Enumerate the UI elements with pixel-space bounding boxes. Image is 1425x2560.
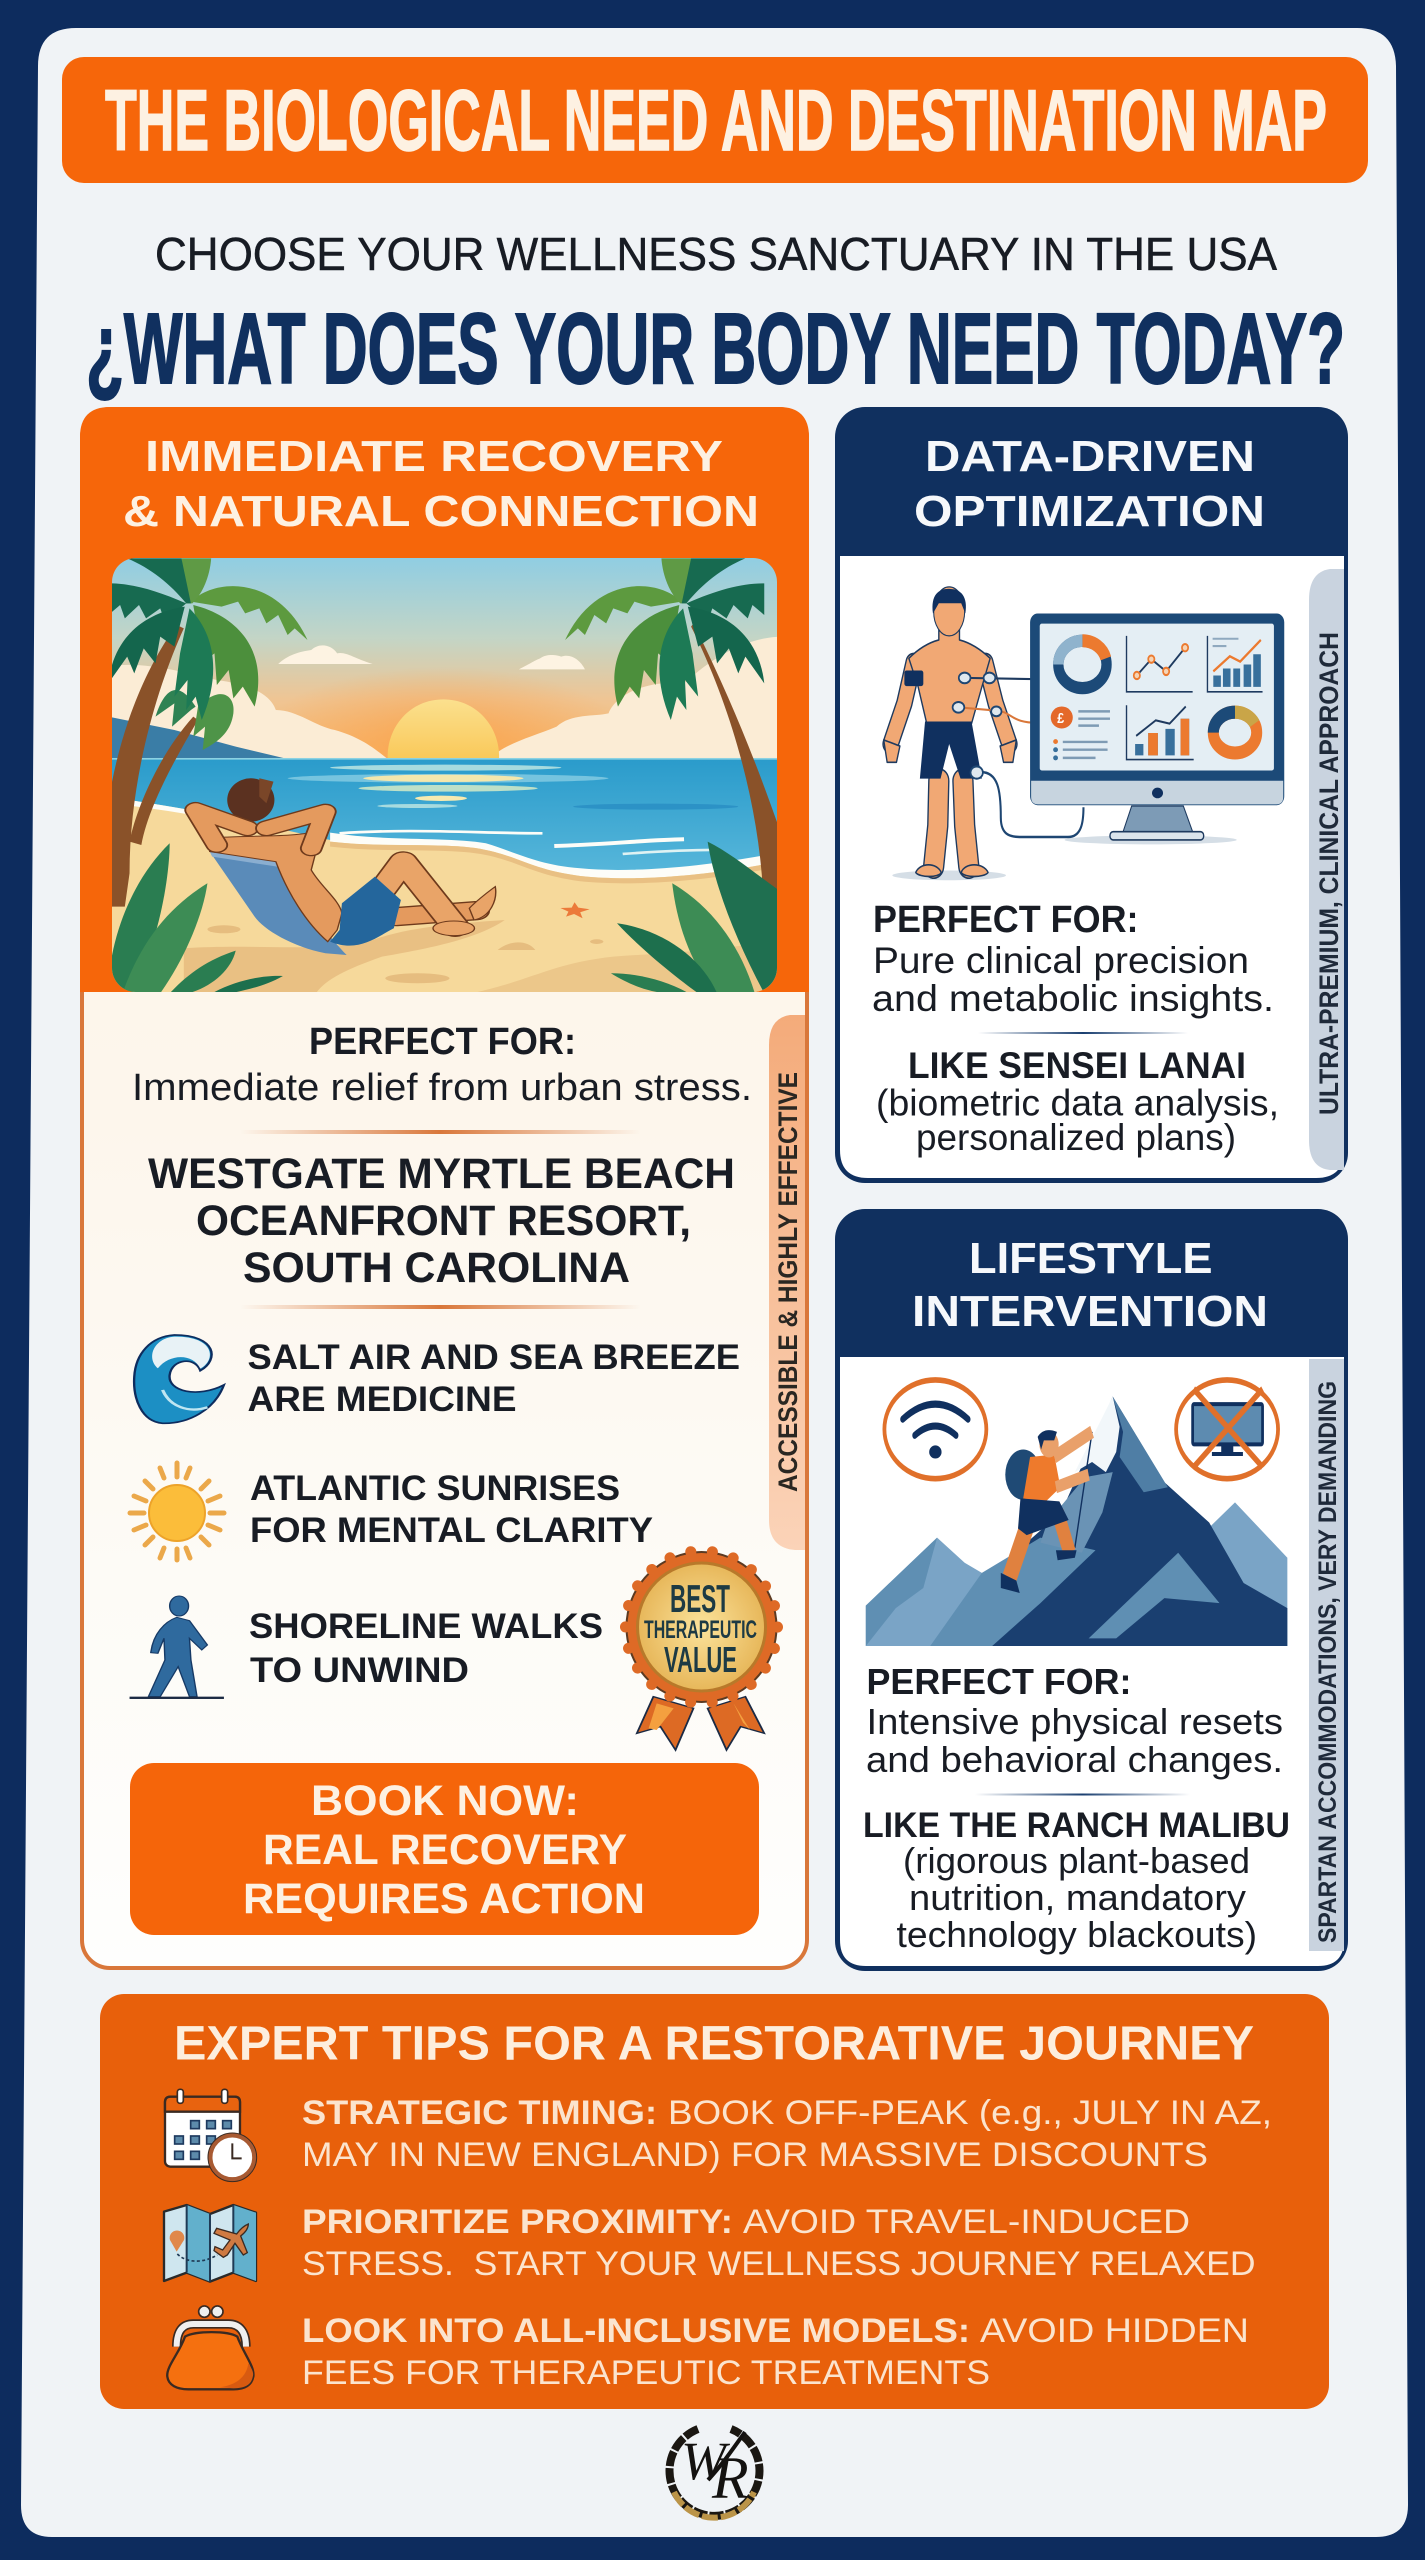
perfect for block: and behavioral changes. [866, 1739, 1283, 1780]
call to action button: REAL RECOVERY [263, 1826, 627, 1874]
perfect for block: PERFECT FOR: [866, 1661, 1132, 1702]
panel: data-driven optimization [835, 407, 1348, 1183]
heading: lifestyle intervention: INTERVENTION [912, 1287, 1268, 1336]
illustration: climber on mountain with no wifi and no screens [866, 1380, 1287, 1646]
perfect for block: PERFECT FOR: [873, 899, 1138, 941]
destination: the ranch malibu: technology blackouts) [896, 1914, 1257, 1955]
destination name: SOUTH CAROLINA [243, 1244, 630, 1292]
tip: all-inclusive models: FEES FOR THERAPEUTIC TREATMENTS [302, 2354, 990, 2392]
tip: strategic timing: MAY IN NEW ENGLAND) FOR MASSIVE DISCOUNTS [302, 2136, 1208, 2174]
panel: expert tips [100, 1994, 1329, 2409]
call to action button: REQUIRES ACTION [243, 1875, 645, 1923]
heading: expert tips: EXPERT TIPS FOR A RESTORATIVE JOURNEY [174, 2018, 1254, 2070]
heading: lifestyle intervention [912, 1234, 1268, 1336]
icon: no screens [1176, 1380, 1278, 1479]
badge: best therapeutic value: THERAPEUTIC [644, 1616, 757, 1644]
side tab: spartan accommodations: SPARTAN ACCOMMODATIONS, VERY DEMANDING [1314, 1381, 1342, 1943]
destination name: OCEANFRONT RESORT, [196, 1197, 691, 1245]
tip: strategic timing [302, 2094, 1272, 2174]
heading: data-driven optimization [914, 432, 1265, 536]
tip: all-inclusive models: AVOID HIDDEN [980, 2312, 1249, 2350]
icon: calendar and clock [165, 2089, 257, 2182]
benefit: shoreline walks [130, 1596, 603, 1699]
destination: sensei lanai: personalized plans) [916, 1117, 1236, 1158]
call to action button [130, 1763, 759, 1935]
side tab: accessible and highly effective: ACCESSIBLE & HIGHLY EFFECTIVE [773, 1072, 803, 1492]
perfect for block [132, 1021, 752, 1109]
destination: the ranch malibu: LIKE THE RANCH MALIBU [863, 1806, 1290, 1845]
logo: WR laurel [670, 2429, 760, 2518]
benefit: atlantic sunrises: ATLANTIC SUNRISES [250, 1469, 620, 1508]
benefit: shoreline walks: TO UNWIND [250, 1651, 469, 1690]
badge: best therapeutic value [626, 1551, 778, 1750]
icon: wifi [884, 1380, 986, 1479]
icon: wave [134, 1335, 224, 1423]
icon: map with airplane [164, 2205, 256, 2282]
panel header: immediate recovery: IMMEDIATE RECOVERY [145, 432, 723, 481]
illustration: body sensors connected to monitor: £ [1057, 710, 1065, 726]
destination: sensei lanai [876, 1045, 1279, 1158]
tip: prioritize proximity [302, 2203, 1256, 2283]
tip: prioritize proximity: STRESS. START YOUR WELLNESS JOURNEY RELAXED [302, 2245, 1256, 2283]
benefit: salt air: SALT AIR AND SEA BREEZE [248, 1338, 740, 1377]
tip: all-inclusive models: LOOK INTO ALL-INCLUSIVE MODELS: [302, 2312, 970, 2350]
call to action button: BOOK NOW: [311, 1777, 579, 1825]
panel: immediate recovery [80, 407, 809, 1968]
perfect for block [872, 899, 1274, 1019]
icon: walking person [130, 1596, 224, 1699]
perfect for block: Intensive physical resets [866, 1701, 1283, 1742]
benefit: atlantic sunrises [130, 1463, 653, 1560]
benefit: salt air [134, 1335, 740, 1423]
icon: coin purse [167, 2306, 253, 2389]
heading: lifestyle intervention: LIFESTYLE [969, 1234, 1212, 1283]
logo: WR laurel: W [681, 2431, 731, 2491]
destination: sensei lanai: (biometric data analysis, [876, 1082, 1279, 1124]
heading: data-driven optimization: DATA-DRIVEN [925, 432, 1255, 481]
illustration: body sensors connected to monitor [884, 587, 1284, 880]
badge: best therapeutic value: VALUE [664, 1639, 737, 1680]
tip: prioritize proximity: PRIORITIZE PROXIMITY: [302, 2203, 733, 2241]
panel header: immediate recovery [80, 407, 809, 992]
tip: strategic timing: BOOK OFF-PEAK (e.g., JULY IN AZ, [668, 2094, 1272, 2132]
perfect for block: PERFECT FOR: [309, 1021, 576, 1063]
illustration: man relaxing on beach at sunset [108, 557, 783, 993]
panel: lifestyle intervention [835, 1209, 1348, 1971]
perfect for block [866, 1661, 1283, 1780]
benefit: salt air: ARE MEDICINE [248, 1380, 516, 1419]
destination: the ranch malibu [863, 1806, 1290, 1955]
subtitle: CHOOSE YOUR WELLNESS SANCTUARY IN THE USA [155, 228, 1277, 280]
icon: sun [130, 1463, 224, 1560]
panel header: immediate recovery: & NATURAL CONNECTION [123, 487, 759, 536]
tip: prioritize proximity: AVOID TRAVEL-INDUCED [743, 2203, 1190, 2241]
badge: best therapeutic value: BEST [670, 1578, 730, 1621]
perfect for block: Immediate relief from urban stress. [132, 1067, 752, 1109]
destination: sensei lanai: LIKE SENSEI LANAI [908, 1045, 1246, 1086]
benefit: atlantic sunrises: FOR MENTAL CLARITY [250, 1511, 653, 1550]
destination name: WESTGATE MYRTLE BEACH [148, 1150, 735, 1198]
logo: WR laurel: R [711, 2445, 749, 2511]
destination: the ranch malibu: (rigorous plant-based [903, 1840, 1250, 1881]
heading: data-driven optimization: OPTIMIZATION [914, 487, 1265, 536]
destination: the ranch malibu: nutrition, mandatory [909, 1877, 1246, 1918]
side tab: ultra-premium clinical approach: ULTRA-PREMIUM, CLINICAL APPROACH [1314, 632, 1344, 1115]
destination name [148, 1150, 735, 1292]
tip: all-inclusive models [302, 2312, 1249, 2392]
tip: strategic timing: STRATEGIC TIMING: [302, 2094, 657, 2132]
benefit: shoreline walks: SHORELINE WALKS [249, 1607, 603, 1646]
perfect for block: and metabolic insights. [872, 978, 1274, 1019]
perfect for block: Pure clinical precision [873, 940, 1249, 981]
figure [884, 626, 1016, 876]
